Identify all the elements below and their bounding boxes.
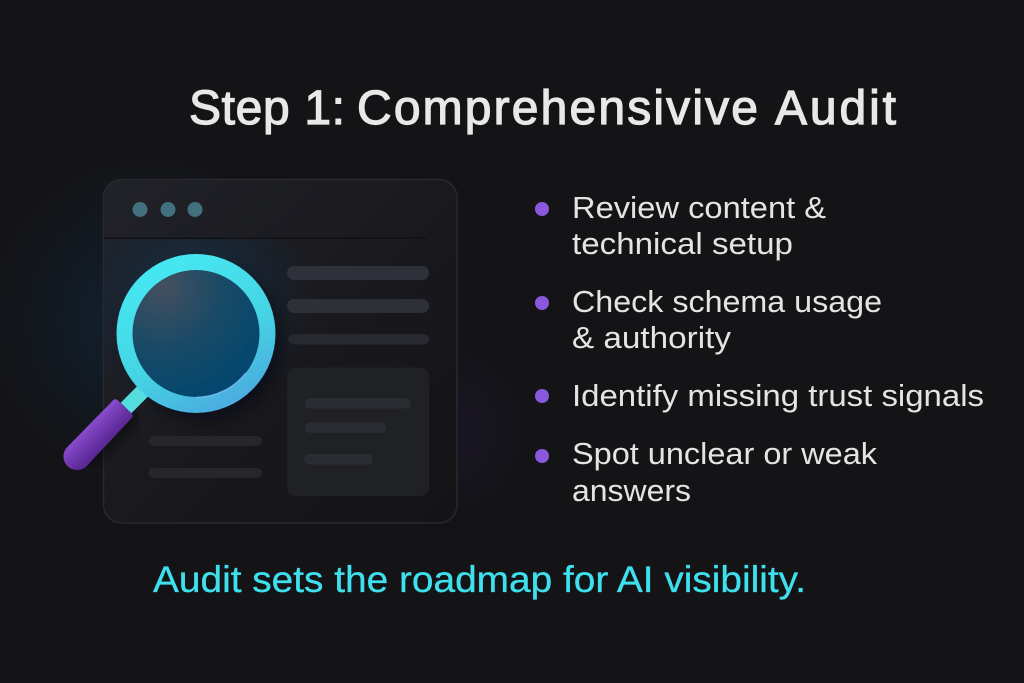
bullet: weak answers: [535, 436, 878, 508]
illustration: browser window with magnifier: [66, 180, 457, 523]
right content lines: [287, 266, 429, 344]
bullet: review content: Review content &: [572, 190, 826, 225]
bullet: trust signals: Identify missing trust signals: [572, 378, 984, 413]
background glow: purple: [340, 330, 540, 530]
left content lines: [148, 436, 262, 478]
bullet: review content: technical setup: [572, 226, 793, 261]
bullet: check schema: [535, 284, 882, 355]
bullet: review content: [535, 190, 826, 261]
bullet: weak answers: Spot unclear or weak: [572, 436, 878, 471]
window control dots: [132, 202, 202, 217]
footer tagline: Audit sets the roadmap for AI visibility.: [153, 559, 806, 600]
bullet: check schema: & authority: [572, 320, 732, 355]
bullet: check schema: Check schema usage: [572, 284, 882, 319]
title: [189, 82, 896, 135]
icon: magnifying glass: [66, 262, 282, 467]
panel: browser window: [104, 180, 457, 523]
title: Step 1:: [189, 82, 345, 135]
title: Comprehensivive: [357, 82, 758, 135]
background glow: blue: [0, 130, 340, 510]
content card: [287, 368, 429, 496]
bullet: weak answers: answers: [572, 473, 691, 508]
bullet list: [535, 190, 984, 508]
title: Audit: [775, 82, 896, 135]
